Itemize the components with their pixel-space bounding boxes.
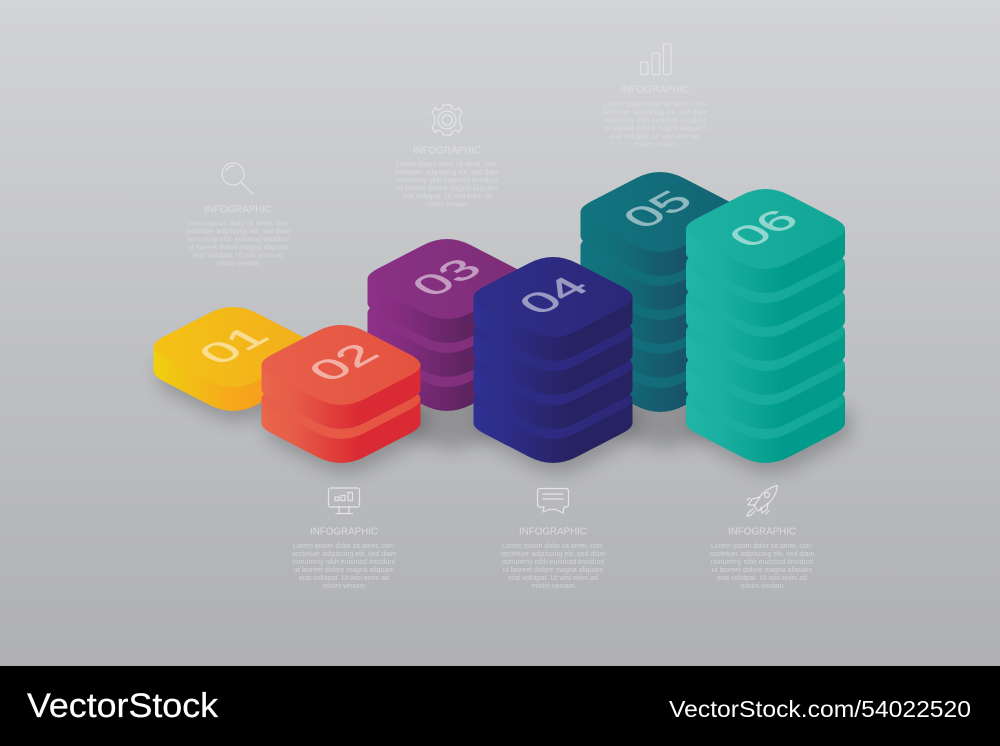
number 04: 04 <box>507 270 599 320</box>
caption 01: INFOGRAPHIC <box>204 204 272 216</box>
caption 01 <box>185 163 291 268</box>
footer logo text: VectorStock <box>27 687 219 725</box>
caption 04: ut laoreet dolore magna aliquam <box>503 567 603 574</box>
icon: rocket <box>747 486 778 516</box>
caption 04: minim veniam <box>531 583 575 590</box>
icon: gear <box>432 105 462 135</box>
caption 02: minim veniam <box>322 583 366 590</box>
caption 02 <box>291 488 397 590</box>
stack 03 <box>368 239 532 449</box>
caption 01: ut laoreet dolore magna aliquam <box>188 244 288 252</box>
caption 06: Lorem ipsum dolor sit amet, con- <box>711 543 814 550</box>
icon: speech bubble <box>538 488 568 513</box>
number 02: 02 <box>297 337 389 387</box>
caption 03: Lorem ipsum dolor sit amet, con- <box>396 162 499 168</box>
caption 02: Lorem ipsum dolor sit amet, con- <box>293 543 396 550</box>
stack 05 <box>580 172 744 448</box>
stack 02 <box>262 325 426 473</box>
caption 05: sectetuer adipiscing elit, sed diam <box>602 110 708 116</box>
icon: bar chart <box>640 44 671 74</box>
caption 05 <box>602 44 708 148</box>
caption 03: INFOGRAPHIC <box>413 146 481 156</box>
caption 01: Lorem ipsum dolor sit amet, con- <box>187 220 290 228</box>
footer url text: VectorStock.com/54022520 <box>669 696 971 722</box>
caption 06: minim veniam <box>740 583 784 590</box>
caption 06: INFOGRAPHIC <box>728 526 796 538</box>
caption 05: nonummy nibh euismod tincidunt <box>604 118 706 124</box>
caption 06: ut laoreet dolore magna aliquam <box>712 567 812 574</box>
caption 01: erat volutpat. Ut wisi enim ad <box>193 252 283 260</box>
caption 04: INFOGRAPHIC <box>519 526 587 538</box>
caption 04 <box>500 488 606 590</box>
stack 06 <box>686 189 850 473</box>
caption 05: erat volutpat. Ut wisi enim ad <box>610 134 700 140</box>
caption 04: erat volutpat. Ut wisi enim ad <box>508 575 598 582</box>
caption 04: sectetuer adipiscing elit, sed diam <box>500 551 606 558</box>
caption 03: ut laoreet dolore magna aliquam <box>397 186 497 192</box>
number 05: 05 <box>611 184 703 234</box>
caption 02: nonummy nibh euismod tincidunt <box>293 559 395 566</box>
caption 05: Lorem ipsum dolor sit amet, con- <box>604 102 707 108</box>
caption 05: minim veniam <box>633 142 677 148</box>
number 06: 06 <box>717 203 809 253</box>
caption 02: ut laoreet dolore magna aliquam <box>294 567 394 574</box>
caption 06: nonummy nibh euismod tincidunt <box>711 559 813 566</box>
number 03: 03 <box>400 252 492 302</box>
caption 03: minim veniam <box>425 202 469 208</box>
footer bar <box>0 666 1000 746</box>
caption 05: ut laoreet dolore magna aliquam <box>605 126 705 132</box>
icon: magnifier <box>222 163 253 194</box>
caption 02: erat volutpat. Ut wisi enim ad <box>299 575 389 582</box>
caption 04: Lorem ipsum dolor sit amet, con- <box>502 543 605 550</box>
stack 01 <box>154 307 318 421</box>
caption 05: INFOGRAPHIC <box>621 84 689 96</box>
caption 01: sectetuer adipiscing elit, sed diam <box>185 228 291 236</box>
caption 01: minim veniam <box>216 260 260 268</box>
caption 03: nonummy nibh euismod tincidunt <box>396 178 498 184</box>
caption 03: erat volutpat. Ut wisi enim ad <box>402 194 492 200</box>
caption 04: nonummy nibh euismod tincidunt <box>502 559 604 566</box>
caption 02: INFOGRAPHIC <box>310 526 378 538</box>
icon: monitor <box>328 488 360 514</box>
caption 03: sectetuer adipiscing elit, sed diam <box>394 170 500 176</box>
caption 02: sectetuer adipiscing elit, sed diam <box>291 551 397 558</box>
caption 06: sectetuer adipiscing elit, sed diam <box>709 551 815 558</box>
caption 03 <box>394 105 500 208</box>
caption 06: erat volutpat. Ut wisi enim ad <box>717 575 807 582</box>
stack 04 <box>474 257 638 473</box>
caption 01: nonummy nibh euismod tincidunt <box>187 236 289 244</box>
number 01: 01 <box>187 320 279 370</box>
caption 06 <box>709 486 815 590</box>
